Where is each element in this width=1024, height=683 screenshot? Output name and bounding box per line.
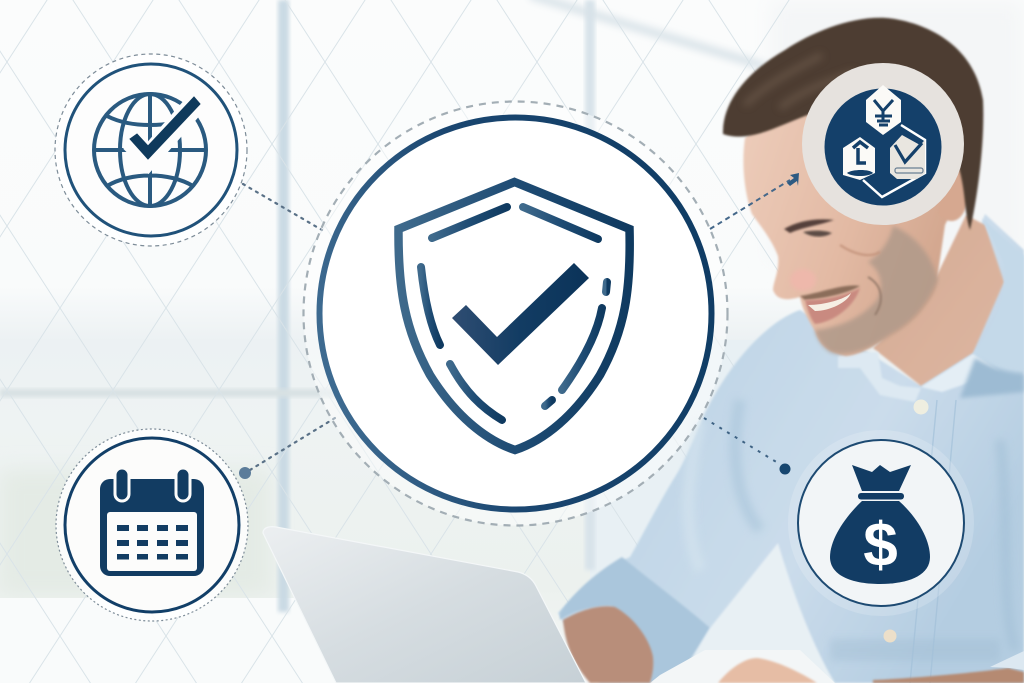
icon label: dollar sign: $ [863, 511, 898, 580]
smile [805, 288, 860, 324]
hair highlights [745, 55, 855, 108]
left hand on keyboard [563, 606, 653, 683]
connector: shield to money bag [704, 418, 790, 474]
icon: globe with check [94, 94, 206, 206]
neck [873, 215, 1004, 386]
right hand [718, 658, 817, 683]
icon: linked hexagons [843, 85, 925, 197]
shirt folds [688, 400, 1015, 650]
laptop [263, 527, 586, 683]
person [558, 18, 1024, 683]
right cuff [990, 651, 1024, 670]
jaw crease [868, 277, 881, 315]
shirt buttons [884, 400, 928, 642]
shirt cuff [560, 557, 710, 683]
moustache shadow [800, 285, 860, 300]
panel: process hexagons badge [802, 63, 964, 225]
panel: central shield badge [304, 102, 728, 526]
desk [650, 650, 835, 683]
hair [723, 18, 983, 230]
stubble [815, 226, 938, 354]
eyebrow and eye [784, 219, 880, 255]
icon: shield [398, 182, 630, 450]
right forearm [873, 668, 1024, 683]
shirt placket [910, 400, 956, 683]
connector: calendar to shield [239, 418, 335, 479]
connector arrow: shield to hexagon icon [710, 173, 799, 229]
icon: money bag [830, 465, 930, 584]
collar [973, 218, 1024, 372]
nose highlight [790, 269, 816, 291]
gap between arm and torso [686, 543, 835, 683]
face [743, 100, 962, 356]
icon: calendar [100, 468, 204, 576]
panel: calendar badge [56, 429, 248, 621]
icon: check mark [452, 263, 589, 365]
ear [938, 164, 968, 221]
connector: globe to shield [243, 184, 322, 230]
panel: money bag badge [788, 430, 974, 616]
shirt torso and sleeve [558, 214, 1024, 683]
panel: globe badge [55, 54, 247, 246]
diamond lattice overlay [0, 0, 790, 683]
